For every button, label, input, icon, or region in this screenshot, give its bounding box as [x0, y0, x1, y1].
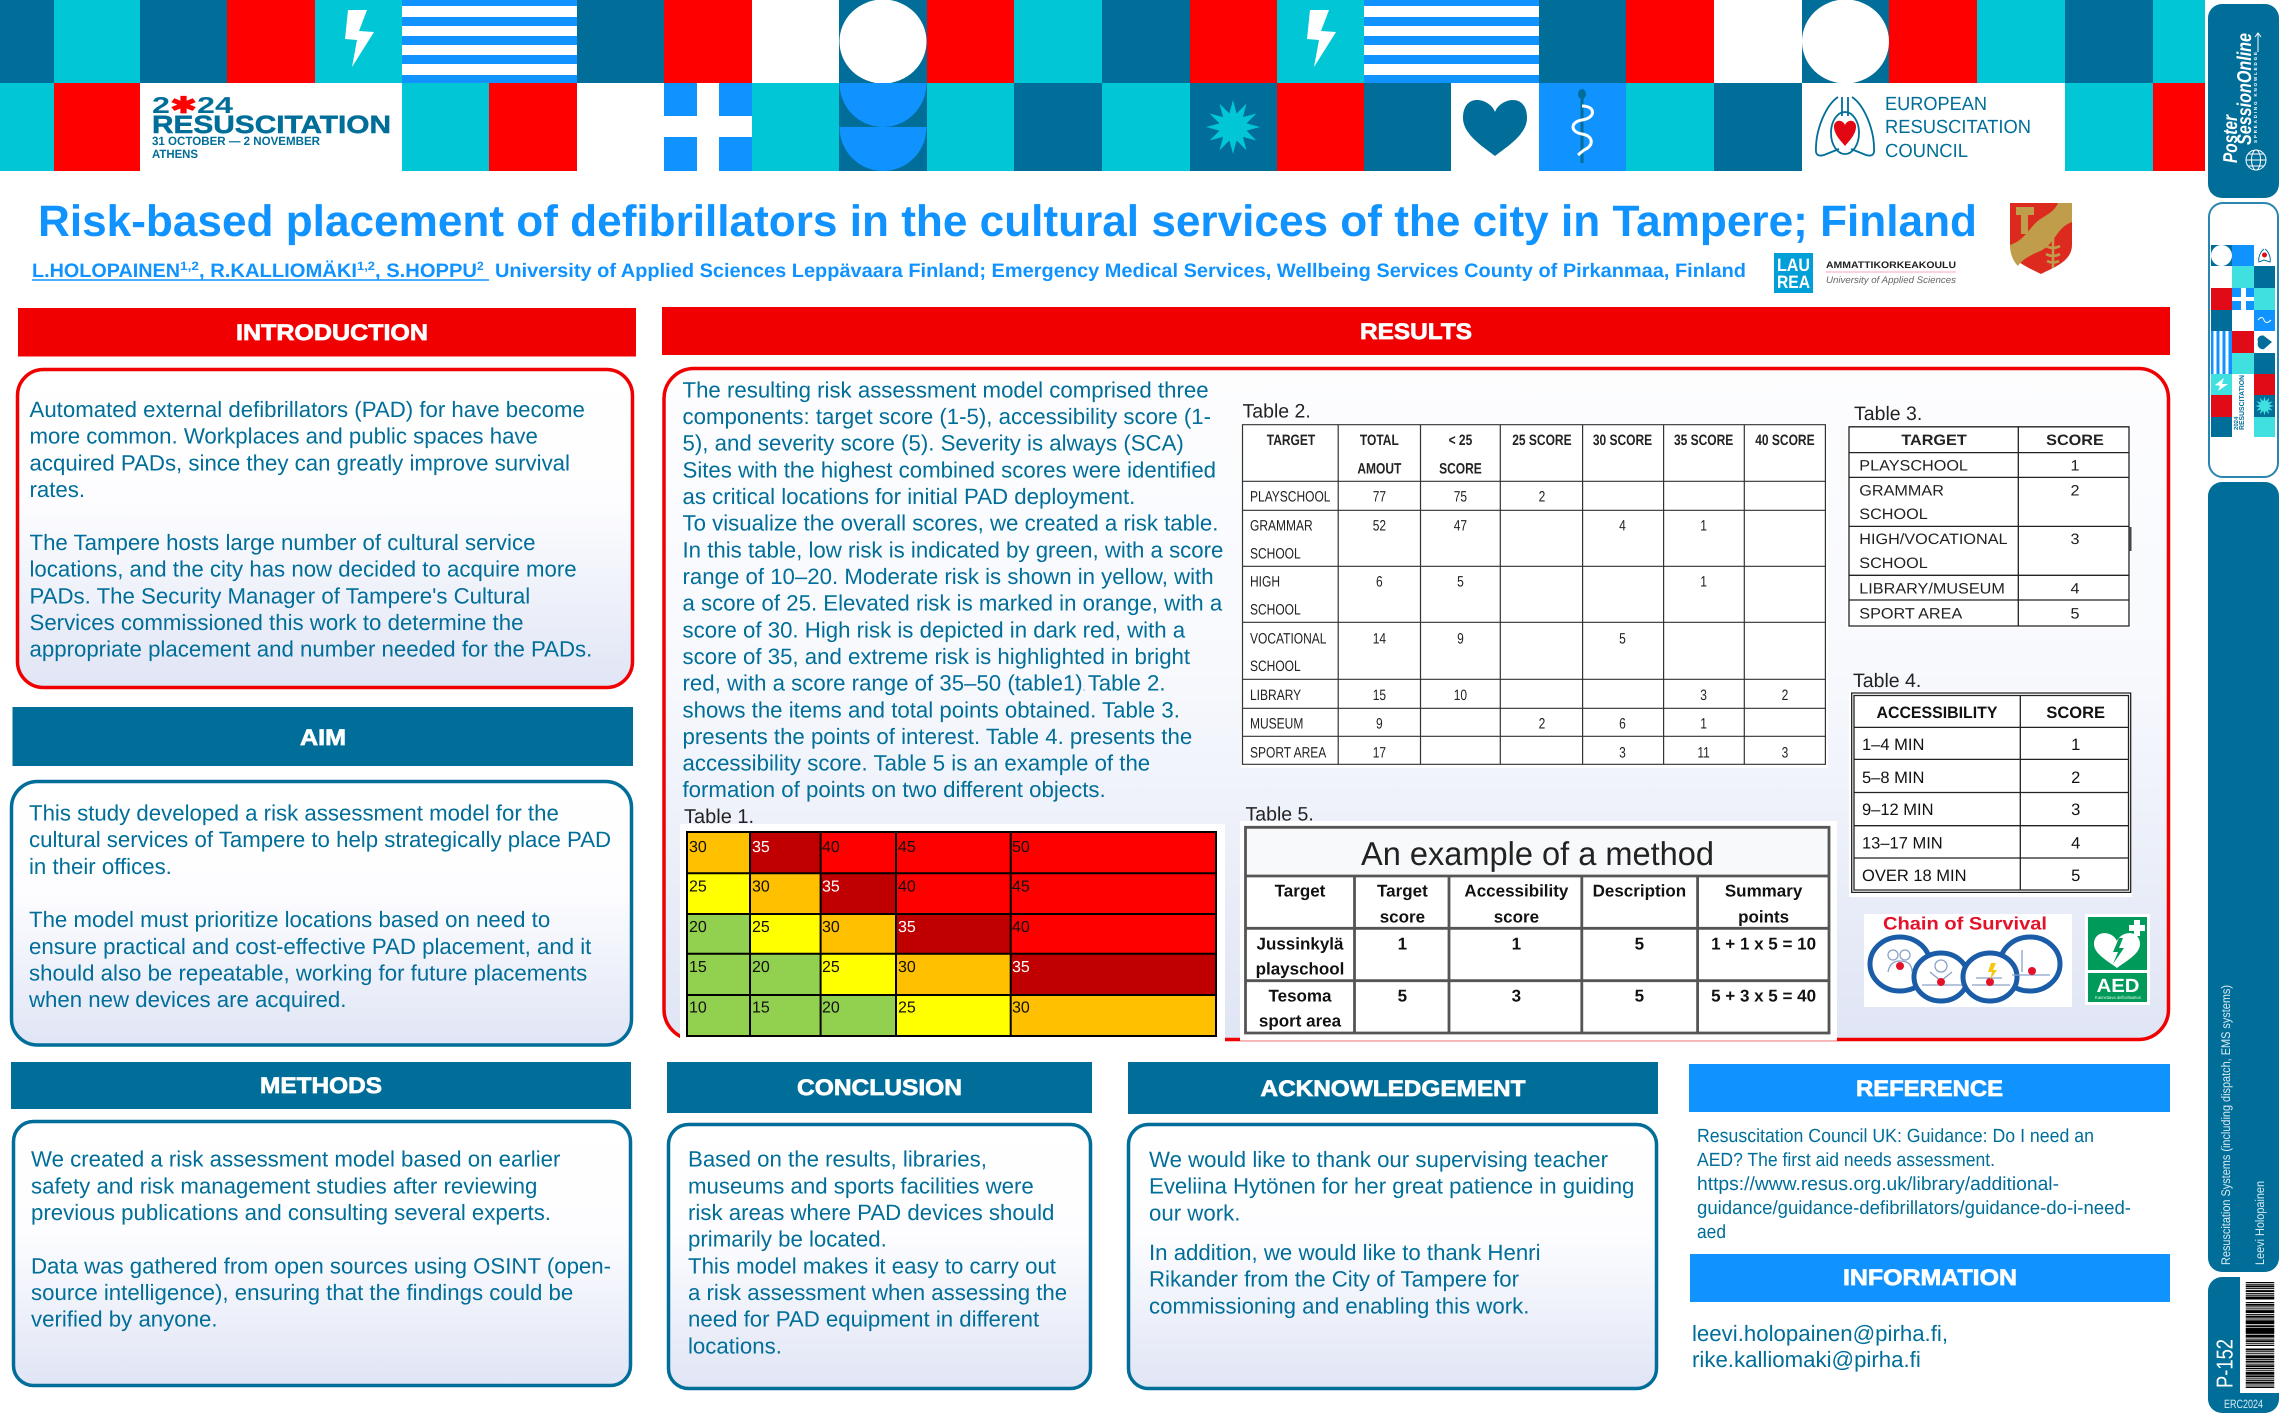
text: aim body: ensure practical and cost-effective PAD placement, and it	[29, 934, 592, 959]
text: reference body: aed	[1697, 1222, 1726, 1243]
panel: methods box	[14, 1122, 630, 1386]
heading: reference: REFERENCE	[1856, 1076, 2003, 1101]
icon: greek cross	[664, 83, 752, 171]
table 2 cell text: 52	[1373, 518, 1386, 535]
heading: methods	[11, 1062, 631, 1109]
table 4 cell text: 1–4 MIN	[1862, 736, 1924, 754]
table 2 cell text: PLAYSCHOOL	[1250, 489, 1330, 506]
table 4 cell text: 1	[2071, 736, 2080, 754]
logo: Laurea	[1774, 253, 1956, 293]
table 2: items and total points: Table 2.	[1242, 401, 1311, 423]
table 5 cell text	[1256, 882, 1816, 1031]
table 4: accessibility score	[1849, 670, 2132, 897]
table 3 cell text: SPORT AREA	[1859, 605, 1962, 622]
table 2 cell text: 6	[1376, 574, 1383, 591]
table 2 cell text: 5	[1619, 630, 1626, 647]
logo: Laurea: LAU	[1777, 255, 1810, 275]
icon: white circle	[840, 0, 926, 84]
risk matrix scores: 25	[752, 919, 770, 936]
table 2 cell text: 9	[1376, 715, 1383, 732]
table 4 cell text: 9–12 MIN	[1862, 801, 1934, 819]
table 5 cell text: 1	[1398, 934, 1407, 953]
text: conclusion body: risk areas where PAD devices should	[688, 1200, 1054, 1225]
table 2 cell text: 14	[1373, 630, 1386, 647]
table 5 cell text: Tesoma	[1268, 987, 1332, 1006]
heading: acknowledgement: ACKNOWLEDGEMENT	[1260, 1076, 1526, 1101]
panel: aim box	[12, 782, 632, 1045]
table 4 cell text: 4	[2071, 834, 2080, 852]
logo: Laurea: University of Applied Sciences	[1826, 275, 1956, 286]
risk matrix scores: 40	[898, 879, 916, 896]
authors: , S.HOPPU	[375, 260, 477, 282]
logo: European Resuscitation Council	[1816, 94, 2031, 162]
table 5: example of a method: Table 5.	[1246, 804, 1314, 826]
table 4: accessibility score: Table 4.	[1853, 670, 1921, 692]
table 3 cell text: GRAMMAR	[1859, 482, 1944, 499]
table 3 cell text: TARGET	[1901, 432, 1967, 449]
risk matrix scores: 30	[822, 919, 840, 936]
sidebar: poster session online logo	[2208, 4, 2279, 198]
table 2 cell text: 10	[1454, 687, 1467, 704]
table 5 cell text: 1 + 1 x 5 = 10	[1711, 934, 1816, 953]
table 5 cell text: Summary	[1725, 882, 1803, 901]
logo: Resuscitation 2024: RESUSCITATION	[152, 111, 391, 139]
text: results body: formation of points on two different objects.	[682, 777, 1106, 802]
text: results body: range of 10–20. Moderate risk is shown in yellow, with	[682, 564, 1214, 589]
text: results body: as critical locations for initial PAD deployment.	[682, 484, 1135, 509]
text: methods body: We created a risk assessment model based on earlier	[31, 1147, 561, 1172]
sidebar: poster number and barcode: P-152	[2212, 1339, 2238, 1388]
text: acknowledgement body: Eveliina Hytönen for her great patience in guiding	[1149, 1174, 1634, 1199]
text: methods body: previous publications and consulting several experts.	[31, 1200, 551, 1225]
text: results body: In this table, low risk is indicated by green, with a score	[682, 537, 1223, 562]
text: results body: accessibility score. Table 5 is an example of the	[682, 751, 1150, 776]
text: methods body: source intelligence), ensuring that the findings could be	[31, 1280, 573, 1305]
banner: decorative tile header	[0, 0, 2205, 171]
risk matrix scores: 15	[752, 1000, 770, 1017]
risk matrix scores: 30	[752, 879, 770, 896]
text: conclusion body: This model makes it easy to carry out	[688, 1253, 1057, 1278]
table 2 cell text: 40 SCORE	[1755, 432, 1815, 449]
heading: introduction	[18, 308, 636, 356]
text: acknowledgement body: commissioning and enabling this work.	[1149, 1293, 1529, 1318]
section: reference	[1689, 1064, 2170, 1243]
sidebar: poster number and barcode	[2208, 1277, 2279, 1413]
heading: results	[662, 307, 2170, 355]
table 2 cell text: HIGH	[1250, 574, 1280, 591]
text: acknowledgement body: Rikander from the City of Tampere for	[1149, 1267, 1520, 1292]
table 3 cell text: 5	[2070, 605, 2079, 622]
icon: greek stripes	[402, 0, 577, 83]
table 4 cell text	[1862, 704, 2105, 885]
text: introduction body: The Tampere hosts large number of cultural service	[30, 530, 535, 555]
text: acknowledgement body: our work.	[1149, 1200, 1240, 1225]
text: reference body: guidance/guidance-defibrillators/guidance-do-i-need-	[1697, 1198, 2131, 1219]
icon: blue half circles	[840, 83, 926, 171]
table 4 cell text: 3	[2071, 801, 2080, 819]
table 2 cell text: SCHOOL	[1250, 602, 1301, 619]
table 2: items and total points	[1241, 401, 1828, 768]
text: results body: a score of 25. Elevated risk is marked in orange, with a	[682, 591, 1223, 616]
table 5 cell text: 3	[1512, 987, 1521, 1006]
section: acknowledgement	[1128, 1062, 1658, 1388]
sidebar: miniature banner card: 2024	[2233, 416, 2240, 430]
table 3 cell text: SCHOOL	[1859, 506, 1928, 523]
heading: conclusion: CONCLUSION	[797, 1075, 962, 1100]
text: conclusion body: primarily be located.	[688, 1227, 887, 1252]
risk matrix scores: 20	[752, 959, 770, 976]
table 3: target score: Table 3.	[1854, 403, 1922, 425]
heading: conclusion	[667, 1062, 1092, 1113]
logo: Resuscitation 2024: 2✱ 24	[152, 92, 233, 118]
table 3 cell text: SCHOOL	[1859, 555, 1928, 572]
table 2 cell text: 1	[1700, 715, 1707, 732]
table 3 cell text: 3	[2070, 531, 2079, 548]
text: introduction body: appropriate placement and number needed for the PADs.	[30, 637, 592, 662]
risk matrix scores: 35	[752, 839, 770, 856]
text: aim body: This study developed a risk assessment model for the	[29, 800, 559, 826]
table 2 cell text: 3	[1782, 744, 1788, 761]
table 2 cell text: 2	[1539, 715, 1545, 732]
icon: AED sign	[2085, 914, 2150, 1005]
text: results body: To visualize the overall scores, we created a risk table.	[682, 511, 1218, 536]
panel: acknowledgement box	[1128, 1124, 1656, 1388]
table 4 cell text: OVER 18 MIN	[1862, 867, 1967, 885]
text: reference body: https://www.resus.org.uk/library/additional-	[1697, 1174, 2059, 1195]
sidebar: topic and presenter bar	[2208, 482, 2279, 1272]
text: results body: 5), and severity score (5). Severity is always (SCA)	[682, 431, 1184, 456]
sidebar: poster session online logo: SessionOnline	[2234, 33, 2256, 145]
barcode	[2246, 1282, 2274, 1388]
risk matrix scores: 40	[1012, 919, 1030, 936]
table 5 cell text: score	[1380, 907, 1425, 926]
text: results body: components: target score (1-5), accessibility score (1-	[682, 404, 1211, 429]
table 5 cell text: Accessibility	[1464, 882, 1569, 901]
heading: aim: AIM	[300, 725, 346, 750]
text: reference body: Resuscitation Council UK: Guidance: Do I need an	[1697, 1126, 2094, 1147]
table 5 cell text: playschool	[1256, 959, 1344, 978]
table 4 cell text: 2	[2071, 769, 2080, 787]
text: results body: presents the points of interest. Table 4. presents the	[682, 724, 1192, 749]
risk matrix scores: 50	[1012, 839, 1030, 856]
icon: white circle	[1802, 0, 1889, 84]
text: aim body: should also be repeatable, working for future placements	[29, 960, 587, 986]
image: chain of survival: Chain of Survival	[1883, 913, 2047, 933]
section: conclusion	[667, 1062, 1092, 1388]
sidebar: topic and presenter bar: Resuscitation Systems (including dispatch, EMS systems)	[2219, 985, 2233, 1265]
risk matrix scores: 45	[1012, 879, 1030, 896]
text: introduction body: Services commissioned this work to determine the	[30, 610, 523, 635]
logo: Resuscitation 2024: ATHENS	[152, 147, 198, 161]
heading: results: RESULTS	[1360, 319, 1472, 344]
sidebar: topic and presenter bar: Leevi Holopainen	[2253, 1181, 2267, 1265]
logo: Resuscitation 2024	[152, 92, 391, 161]
table 4 cell text: ACCESSIBILITY	[1876, 704, 1998, 722]
authors: 1,2	[357, 259, 375, 273]
table 2 cell text: 30 SCORE	[1593, 432, 1652, 449]
icon: greek stripes	[1364, 0, 1539, 83]
table 3 cell text: HIGH/VOCATIONAL	[1859, 531, 2008, 548]
sidebar: miniature banner card: RESUSCITATION	[2239, 375, 2246, 430]
text: introduction body: PADs. The Security Manager of Tampere's Cultural	[30, 583, 530, 608]
text: introduction body: locations, and the city has now decided to acquire more	[30, 557, 577, 582]
table 2 cell text: 11	[1697, 744, 1710, 761]
table 4 cell text: 13–17 MIN	[1862, 834, 1943, 852]
icon: sun burst	[1206, 100, 1260, 154]
risk matrix cells	[687, 832, 1216, 1036]
authors: 1,2	[180, 259, 199, 273]
table 2 cell text: 3	[1619, 744, 1626, 761]
logo: Tampere crest	[2010, 203, 2072, 274]
table 2 cell text: 6	[1619, 715, 1626, 732]
text: contact emails: rike.kalliomaki@pirha.fi	[1692, 1347, 1921, 1372]
table 2 cell text: TARGET	[1267, 432, 1315, 449]
table 2 cell text: MUSEUM	[1250, 715, 1303, 732]
risk matrix scores: 30	[689, 839, 707, 856]
logo: European Resuscitation Council: COUNCIL	[1885, 141, 1968, 162]
table 5 cell text: Jussinkylä	[1257, 934, 1344, 953]
table 2 cell text: 25 SCORE	[1512, 432, 1572, 449]
table 2 cell text: 35 SCORE	[1674, 432, 1733, 449]
table 2 cell text: SPORT AREA	[1250, 744, 1326, 761]
panel: conclusion box	[668, 1124, 1090, 1388]
risk matrix scores: 35	[822, 879, 840, 896]
authors	[32, 259, 489, 282]
icon: heart	[1463, 100, 1527, 156]
text: aim body: The model must prioritize locations based on need to	[29, 907, 550, 932]
table 2 cell text: SCORE	[1439, 460, 1482, 477]
table 4 cell text: 5–8 MIN	[1862, 769, 1924, 787]
heading: aim	[12, 707, 633, 766]
table 3 cell text: 4	[2070, 580, 2079, 598]
section: introduction	[18, 308, 636, 688]
table 2 cell text: 9	[1457, 630, 1464, 647]
heading: introduction: INTRODUCTION	[236, 320, 428, 345]
icon: rod of asclepius	[1539, 83, 1626, 171]
table 2 cell text: 2	[1782, 687, 1788, 704]
text: results body: red, with a score range of 35–50 (table1). Table 2.	[682, 671, 1166, 696]
text: reference body: AED? The first aid needs assessment.	[1697, 1150, 1995, 1171]
table 3 cell text: PLAYSCHOOL	[1859, 457, 1968, 474]
table 1: risk matrix: Table 1.	[684, 806, 754, 828]
text: results body: The resulting risk assessment model comprised three	[682, 377, 1209, 402]
table 5 cell text: 5 + 3 x 5 = 40	[1711, 987, 1816, 1006]
icon: AED sign: Kannettava defibrillaattori	[2095, 995, 2141, 1000]
table 2 cell text: 4	[1619, 518, 1626, 535]
heading: reference	[1689, 1064, 2170, 1112]
table 2 cell text: 77	[1373, 489, 1386, 506]
table 2 cell text: 2	[1539, 489, 1545, 506]
title: Risk-based placement of defibrillators in the cultural services of the city in Tampere; Finland	[38, 197, 1977, 246]
table 5 cell text: sport area	[1259, 1012, 1342, 1031]
table 5 cell text: Target	[1275, 882, 1326, 901]
affiliations: University of Applied Sciences Leppävaara Finland; Emergency Medical Services, Wellbeing Services County of Pirkanmaa, Finland	[495, 260, 1746, 282]
text: results body: score of 30. High risk is depicted in dark red, with a	[682, 617, 1186, 642]
heading: information: INFORMATION	[1843, 1265, 2017, 1290]
text: reference body	[1697, 1126, 2131, 1243]
table 2 cell text: < 25	[1449, 432, 1472, 449]
section: aim	[12, 707, 633, 1045]
risk matrix scores: 35	[898, 919, 916, 936]
text: conclusion body: Based on the results, libraries,	[688, 1147, 987, 1172]
text: methods body: safety and risk management studies after reviewing	[31, 1173, 537, 1198]
logo: European Resuscitation Council: EUROPEAN	[1885, 94, 1987, 115]
section: results	[662, 307, 2170, 1043]
sidebar: poster number and barcode: ERC2024	[2224, 1397, 2263, 1411]
sidebar: poster session online logo: SPREADING KNOWLEDGE	[2253, 52, 2258, 143]
table 4 cell text: SCORE	[2046, 704, 2105, 722]
table 2 cell text: LIBRARY	[1250, 687, 1301, 704]
heading: acknowledgement	[1128, 1062, 1658, 1114]
risk matrix scores: 40	[822, 839, 840, 856]
logo: European Resuscitation Council: RESUSCITATION	[1885, 117, 2031, 138]
table 4 cell text: 5	[2071, 867, 2080, 885]
table 5 cell text: 5	[1398, 987, 1407, 1006]
text: introduction body: acquired PADs, since they can greatly improve survival	[30, 450, 570, 475]
table 2 cell text: 15	[1373, 687, 1386, 704]
panel: introduction box	[18, 370, 632, 688]
risk matrix scores: 10	[689, 1000, 707, 1017]
table 2 cell text: 47	[1454, 518, 1467, 535]
logo: Laurea: REA	[1777, 272, 1810, 292]
table 2 cell text: TOTAL	[1360, 432, 1399, 449]
sidebar: miniature banner card	[2209, 203, 2278, 477]
risk matrix scores: 20	[689, 919, 707, 936]
table 5 cell text: Description	[1593, 882, 1686, 901]
table 3 cell text: LIBRARY/MUSEUM	[1859, 580, 2005, 598]
authors: 2	[477, 259, 484, 273]
text: methods body: verified by anyone.	[31, 1307, 218, 1332]
risk matrix scores: 45	[898, 839, 916, 856]
text: methods body: Data was gathered from open sources using OSINT (open-	[31, 1253, 611, 1278]
table 5 cell text: 5	[1635, 934, 1644, 953]
table 3: target score	[1847, 403, 2132, 628]
table 5: example of a method: An example of a method	[1361, 835, 1714, 872]
text: aim body: cultural services of Tampere to help strategically place PAD	[29, 827, 611, 852]
text: introduction body: more common. Workplaces and public spaces have	[30, 424, 538, 449]
table 2 cell text	[1250, 432, 1815, 761]
heading: information	[1690, 1254, 2170, 1302]
table 3 cell text: SCORE	[2046, 432, 2104, 449]
logo: Resuscitation 2024: 31 OCTOBER — 2 NOVEMBER	[152, 134, 320, 148]
text: introduction body: Automated external defibrillators (PAD) for have become	[30, 397, 585, 422]
table 2 cell text: SCHOOL	[1250, 546, 1301, 563]
logo: Laurea: AMMATTIKORKEAKOULU	[1826, 260, 1956, 271]
table 3 cell text: 1	[2070, 457, 2079, 474]
table 2 cell text: 17	[1373, 744, 1386, 761]
table 3 cell text	[1859, 432, 2104, 622]
icon: AED sign: AED	[2096, 976, 2140, 997]
table 2 cell text: VOCATIONAL	[1250, 630, 1326, 647]
table 2 cell text: 75	[1454, 489, 1467, 506]
text: contact emails: leevi.holopainen@pirha.fi,	[1692, 1321, 1948, 1346]
risk matrix scores: 35	[1012, 959, 1030, 976]
text: conclusion body: a risk assessment when assessing the	[688, 1280, 1067, 1305]
text: aim body: in their offices.	[29, 854, 172, 879]
text: conclusion body: museums and sports facilities were	[688, 1173, 1034, 1198]
heading: methods: METHODS	[260, 1073, 382, 1098]
icon: lightning bolt	[345, 10, 374, 67]
sidebar: poster session online logo: Poster	[2220, 114, 2242, 163]
icon: lightning bolt	[1307, 10, 1336, 67]
risk matrix scores: 25	[898, 1000, 916, 1017]
table 2 cell text: AMOUT	[1357, 460, 1401, 477]
table 5 cell text: score	[1494, 907, 1539, 926]
text: conclusion body: locations.	[688, 1333, 782, 1358]
image: chain of survival	[1864, 913, 2072, 1007]
table 2 cell text: GRAMMAR	[1250, 518, 1313, 535]
panel: results box	[664, 368, 2168, 1040]
risk matrix scores: 25	[689, 879, 707, 896]
authors: L.HOLOPAINEN	[32, 260, 180, 282]
risk matrix scores: 25	[822, 959, 840, 976]
text: results body: shows the items and total points obtained. Table 3.	[682, 697, 1180, 722]
section: information	[1690, 1254, 2170, 1372]
text: aim body: when new devices are acquired.	[28, 987, 346, 1012]
table 2 cell text: SCHOOL	[1250, 658, 1301, 675]
risk matrix scores: 30	[1012, 1000, 1030, 1017]
table 5 cell text: points	[1738, 907, 1789, 926]
table 5: example of a method	[1240, 804, 1837, 1041]
table 3 cell text: 2	[2070, 482, 2079, 499]
section: methods	[11, 1062, 631, 1386]
risk matrix scores	[689, 839, 1030, 1017]
text: acknowledgement body: In addition, we would like to thank Henri	[1149, 1240, 1541, 1265]
table 2 cell text: 1	[1700, 518, 1707, 535]
text: acknowledgement body: We would like to thank our supervising teacher	[1149, 1147, 1609, 1172]
risk matrix scores: 15	[689, 959, 707, 976]
table 2 cell text: 1	[1700, 574, 1707, 591]
text: results body: Sites with the highest combined scores were identified	[682, 457, 1216, 482]
table 2 cell text: 5	[1457, 574, 1464, 591]
table 5 cell text: 1	[1512, 934, 1521, 953]
authors: , R.KALLIOMÄKI	[199, 260, 357, 282]
table 5 cell text: Target	[1377, 882, 1428, 901]
text: results body: score of 35, and extreme risk is highlighted in bright	[682, 644, 1191, 669]
table 2 cell text: 3	[1700, 687, 1707, 704]
table 1: risk matrix	[680, 806, 1225, 1043]
risk matrix scores: 20	[822, 1000, 840, 1017]
text: introduction body: rates.	[30, 477, 85, 502]
text: conclusion body: need for PAD equipment in different	[688, 1307, 1040, 1332]
risk matrix scores: 30	[898, 959, 916, 976]
table 5 cell text: 5	[1635, 987, 1644, 1006]
